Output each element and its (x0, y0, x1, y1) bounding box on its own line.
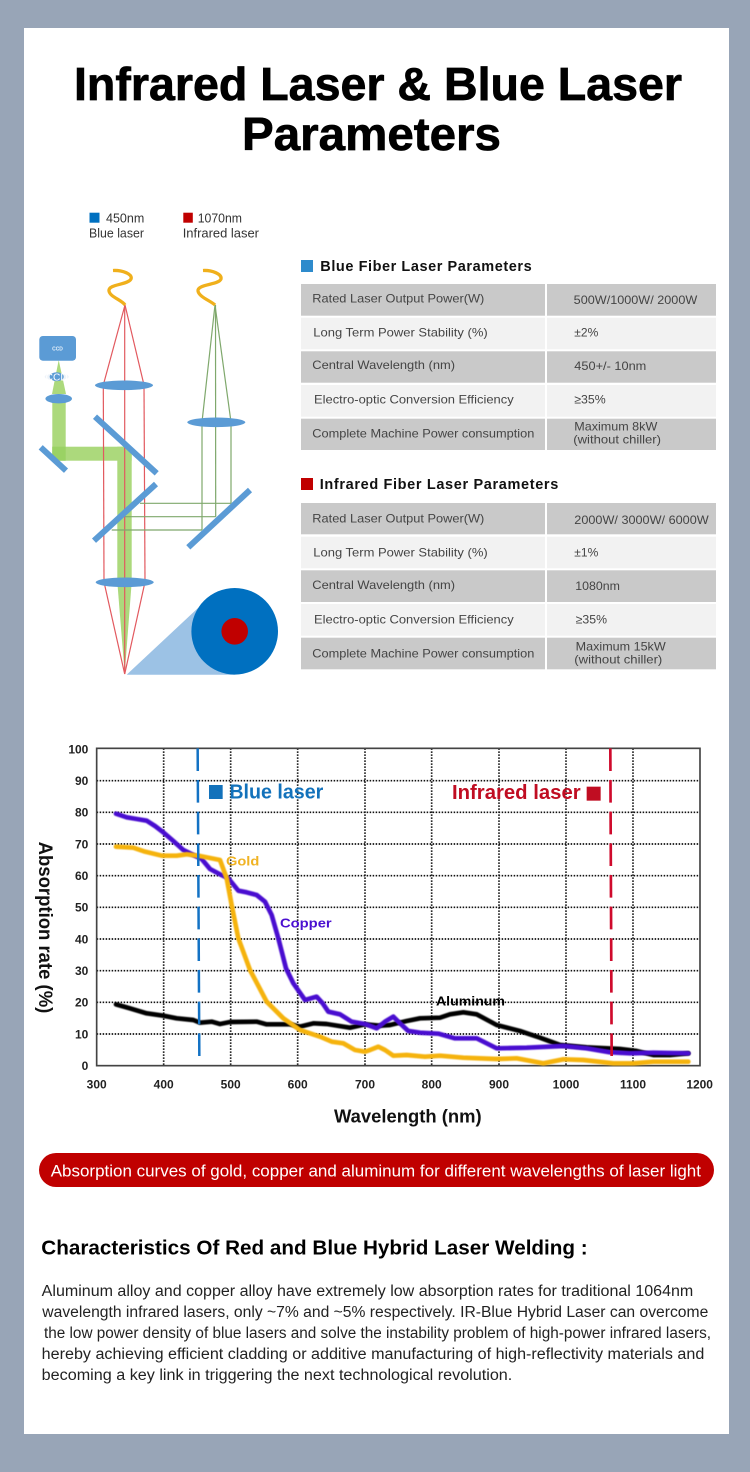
table: blue fiber laser parameters: Electro-optic Conversion Efficiency (314, 393, 514, 407)
x axis tick labels: 900 (489, 1077, 509, 1091)
infrared beam lines (103, 305, 145, 674)
label: copper: Copper (280, 917, 332, 931)
label: blue laser: Blue laser (229, 781, 324, 803)
table: blue fiber laser parameters: Rated Laser Output Power(W) (312, 292, 484, 306)
heading: blue fiber laser parameters: Blue Fiber Laser Parameters (320, 259, 532, 275)
body paragraph (41, 1283, 711, 1384)
x axis tick labels: 400 (154, 1077, 174, 1091)
y axis tick labels: 50 (75, 901, 89, 915)
y axis tick labels: 60 (75, 869, 89, 883)
body paragraph: the low power density of blue lasers and solve the instability problem of high-power infrared lasers, (44, 1325, 711, 1342)
heading: characteristics: Characteristics Of Red and Blue Hybrid Laser Welding : (41, 1237, 588, 1259)
x axis tick labels: 600 (288, 1077, 308, 1091)
x axis tick labels: 300 (87, 1077, 107, 1091)
y axis tick labels: 30 (75, 964, 89, 978)
x axis tick labels: 800 (422, 1077, 442, 1091)
x axis title: Wavelength (nm) (334, 1105, 482, 1126)
label: gold: Gold (226, 855, 259, 869)
gold curve (116, 847, 688, 1063)
y axis title: Absorption rate (%) (34, 842, 55, 1013)
table: infrared fiber laser parameters: (without chiller) (574, 653, 662, 667)
blue beam lines (112, 305, 231, 530)
x axis tick labels: 1100 (620, 1077, 646, 1091)
x axis tick labels: 700 (355, 1077, 375, 1091)
table: infrared fiber laser parameters: Electro-optic Conversion Efficiency (314, 613, 514, 627)
CCD lens label: CCD (46, 372, 68, 384)
y axis tick labels: 20 (75, 996, 89, 1010)
chart frame (97, 748, 700, 1066)
table: infrared fiber laser parameters: Long Term Power Stability (%) (313, 546, 488, 560)
table: blue fiber laser parameters: ±2% (574, 326, 599, 340)
table: infrared fiber laser parameters: Rated Laser Output Power(W) (312, 512, 484, 526)
legend: laser wavelengths: Infrared laser (183, 226, 260, 241)
y axis tick labels: 80 (75, 806, 89, 820)
blue laser marker line (198, 748, 199, 1057)
table: blue fiber laser parameters: 450+/- 10nm (574, 359, 646, 373)
y axis tick labels (68, 743, 89, 1073)
label: aluminum: Aluminum (436, 995, 505, 1009)
y axis tick labels: 70 (75, 837, 89, 851)
legend: laser wavelengths: Blue laser (89, 226, 145, 241)
caption pill: Absorption curves of gold, copper and aluminum for different wavelengths of laser light (51, 1162, 701, 1181)
CCD camera: CCD (52, 346, 63, 352)
table: infrared fiber laser parameters: 1080nm (575, 579, 620, 593)
x axis tick labels: 500 (221, 1077, 241, 1091)
body paragraph: wavelength infrared lasers, only ~7% and ~5% respectively. IR-Blue Hybrid Laser can overcome (41, 1304, 708, 1321)
table: infrared fiber laser parameters (301, 503, 716, 669)
table: blue fiber laser parameters: ≥35% (574, 393, 606, 407)
y axis tick labels: 0 (82, 1059, 89, 1073)
body paragraph: Aluminum alloy and copper alloy have extremely low absorption rates for traditional 1064nm (42, 1283, 693, 1300)
x axis tick labels: 1000 (553, 1077, 580, 1091)
y axis tick labels: 90 (75, 774, 89, 788)
beam spot cone (127, 608, 235, 675)
table: infrared fiber laser parameters: ±1% (574, 546, 599, 560)
table: blue fiber laser parameters: Complete Machine Power consumption (312, 427, 534, 441)
y axis tick labels: 100 (68, 743, 89, 757)
x axis tick labels: 1200 (686, 1077, 713, 1091)
table: infrared fiber laser parameters: Complete Machine Power consumption (312, 647, 534, 661)
table: infrared fiber laser parameters: Central Wavelength (nm) (312, 578, 455, 592)
title (74, 58, 682, 160)
legend: laser wavelengths: 1070nm (198, 211, 242, 226)
table: infrared fiber laser parameters: ≥35% (576, 613, 607, 627)
legend: laser wavelengths (89, 211, 260, 241)
legend: laser wavelengths: 450nm (106, 211, 144, 226)
x axis tick labels (87, 1077, 713, 1091)
y axis tick labels: 10 (75, 1027, 89, 1041)
title: Infrared Laser & Blue Laser (74, 58, 682, 110)
table: blue fiber laser parameters: 500W/1000W/ 2000W (574, 293, 698, 307)
heading: infrared fiber laser parameters: Infrared Fiber Laser Parameters (320, 477, 558, 493)
copper curve (116, 814, 688, 1053)
table: blue fiber laser parameters: (without chiller) (573, 432, 661, 446)
table: infrared fiber laser parameters: Maximum 15kW (576, 639, 666, 653)
table: infrared fiber laser parameters: 2000W/ 3000W/ 6000W (574, 513, 709, 527)
table: blue fiber laser parameters: Central Wavelength (nm) (312, 358, 455, 372)
body paragraph: becoming a key link in triggering the next technological revolution. (42, 1367, 512, 1384)
infrared laser marker line (610, 748, 612, 1057)
icon: fiber input wave, left (109, 270, 131, 305)
mirrors (41, 417, 250, 547)
green CCD observation beam (52, 360, 132, 674)
y axis tick labels: 40 (75, 932, 89, 946)
table: blue fiber laser parameters (301, 284, 716, 450)
table: blue fiber laser parameters: Maximum 8kW (574, 419, 658, 433)
chart grid (97, 748, 700, 1066)
icon: fiber input wave, right (198, 270, 221, 305)
title: Parameters (242, 108, 501, 160)
body paragraph: hereby achieving efficient cladding or additive manufacturing of high-reflectivity materials and (42, 1346, 704, 1363)
lenses (45, 380, 245, 587)
beam spot cross-section (191, 588, 278, 675)
optical path diagram (39, 270, 278, 675)
label: infrared laser: Infrared laser (452, 782, 581, 804)
caption pill (39, 1153, 714, 1187)
absorption chart (34, 743, 713, 1126)
aluminum curve (116, 1004, 688, 1055)
table: blue fiber laser parameters: Long Term Power Stability (%) (313, 326, 488, 340)
CCD camera (39, 336, 76, 361)
